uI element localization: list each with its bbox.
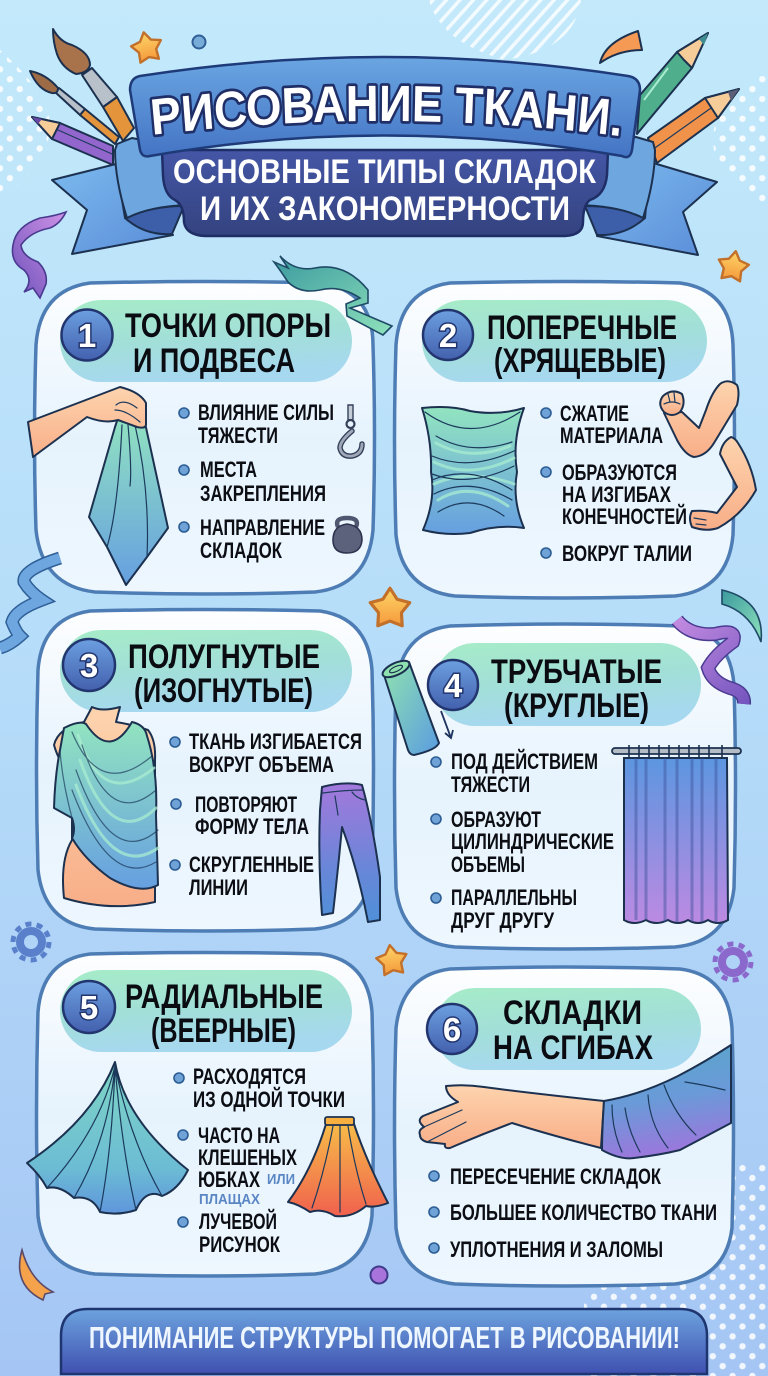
illustration: cloth roll with arrow (380, 657, 453, 755)
bullets 3: ПОВТОРЯЮТ (195, 792, 297, 817)
decorative icons lower (13, 924, 751, 1300)
heading 1: И ПОДВЕСА (133, 342, 295, 380)
panel: 6 folds at bends (394, 967, 734, 1286)
heading 4: ТРУБЧАТЫЕ (491, 653, 662, 691)
bullets 4 (431, 749, 614, 933)
bullets 1: СКЛАДОК (200, 538, 282, 563)
bullets 4: ТЯЖЕСТИ (451, 772, 530, 797)
bullets 4: ПАРАЛЛЕЛЬНЫ (451, 885, 577, 910)
bullets 3: ВОКРУГ ОБЪЕМА (189, 752, 334, 777)
bullets 4: ОБРАЗУЮТ (451, 807, 541, 832)
illustration: flared skirt (288, 1117, 388, 1216)
banner ribbon (51, 56, 718, 256)
icon: green pencil (637, 33, 708, 134)
illustration: draped mannequin (54, 707, 158, 906)
heading 6: 6 (443, 1011, 461, 1048)
heading 4: 4 (444, 667, 463, 704)
decorative icons header (12, 29, 751, 298)
bullets 5: ИЛИ (267, 1171, 295, 1188)
bullets 6 (429, 1164, 717, 1262)
bullets 5: РИСУНОК (199, 1232, 280, 1257)
bullets 4: ЦИЛИНДРИЧЕСКИЕ (451, 829, 614, 854)
heading 4: (КРУГЛЫЕ) (504, 687, 649, 725)
panel: 1 support points (28, 282, 374, 594)
bullets 1: МЕСТА (200, 457, 257, 482)
panel: 2 transverse folds (394, 282, 756, 598)
heading 4 (428, 643, 701, 726)
bullets 2: ВОКРУГ ТАЛИИ (562, 541, 692, 566)
bullets 4: ДРУГ ДРУГУ (451, 908, 554, 933)
icon: large paint brush (53, 29, 134, 141)
decorative ribbons top of panels (0, 256, 761, 648)
footer banner (61, 1309, 707, 1374)
icon: hook (340, 405, 362, 456)
bullets 6: УПЛОТНЕНИЯ И ЗАЛОМЫ (450, 1237, 663, 1262)
icon: kettlebell (333, 518, 362, 553)
bullets 6: ПЕРЕСЕЧЕНИЕ СКЛАДОК (450, 1164, 661, 1189)
bullets 2: СЖАТИЕ (560, 401, 629, 426)
title plate (128, 56, 642, 158)
bullets 2: ОБРАЗУЮТСЯ (562, 460, 677, 485)
icon: orange pencil (648, 89, 739, 163)
bullets 5: ПЛАЩАХ (199, 1191, 260, 1208)
heading 1: ТОЧКИ ОПОРЫ (125, 307, 331, 345)
bullets 1: ЗАКРЕПЛЕНИЯ (200, 481, 326, 506)
bullets 5: ЮБКАХ (198, 1167, 260, 1192)
bullets 3: ТКАНЬ ИЗГИБАЕТСЯ (189, 729, 362, 754)
heading 3: (ИЗОГНУТЫЕ) (134, 672, 313, 710)
heading 6: СКЛАДКИ (503, 994, 642, 1032)
icon: purple pencil (32, 117, 113, 165)
heading 2: 2 (439, 317, 457, 354)
illustration: curtain (612, 745, 741, 923)
bullets 1 (179, 400, 334, 563)
heading 5: 5 (80, 989, 98, 1026)
heading 5: РАДИАЛЬНЫЕ (125, 978, 323, 1016)
bullets 3 (170, 729, 362, 900)
heading 6: НА СГИБАХ (493, 1029, 653, 1067)
heading 1: 1 (78, 317, 96, 354)
illustration: compressed cloth (422, 407, 524, 534)
icon: small paint brush (30, 71, 119, 144)
heading 5: (ВЕЕРНЫЕ) (151, 1012, 296, 1050)
bullets 5: ЛУЧЕВОЙ (199, 1209, 277, 1234)
bullets 1: ВЛИЯНИЕ СИЛЫ (198, 400, 334, 425)
illustration: hanging cloth (28, 387, 168, 585)
illustration: arm with sleeve (420, 1045, 731, 1158)
bullets 3: СКРУГЛЕННЫЕ (189, 852, 314, 877)
bullets 3: ЛИНИИ (189, 875, 248, 900)
heading 6 (427, 988, 701, 1070)
heading 3 (60, 630, 352, 712)
bullets 5: ЧАСТО НА (198, 1123, 280, 1148)
bullets 4: ОБЪЕМЫ (451, 852, 525, 877)
bullets 1: ТЯЖЕСТИ (198, 423, 278, 448)
bullets 2: МАТЕРИАЛА (560, 423, 663, 448)
subtitle plate: ОСНОВНЫЕ ТИПЫ СКЛАДОК (173, 153, 596, 191)
title plate: РИСОВАНИЕ ТКАНИ. (150, 83, 622, 139)
illustration: radial cloth (27, 1062, 188, 1214)
heading 2: ПОПЕРЕЧНЫЕ (487, 309, 677, 347)
bullets 2: НА ИЗГИБАХ (562, 482, 671, 507)
bullets 5: КЛЕШЕНЫХ (198, 1145, 297, 1170)
bullets 2 (541, 401, 692, 566)
heading 3: 3 (80, 647, 98, 684)
bullets 4: ПОД ДЕЙСТВИЕМ (451, 749, 598, 774)
bullets 5: РАСХОДЯТСЯ (193, 1064, 306, 1089)
heading 2: (ХРЯЩЕВЫЕ) (494, 342, 666, 380)
bullets 5 (174, 1064, 345, 1257)
panel: 4 tubular folds (380, 624, 741, 949)
heading 5 (60, 970, 352, 1052)
panel: 3 semi-bent folds (36, 610, 380, 931)
illustration: trousers (319, 783, 380, 922)
bullets 3: ФОРМУ ТЕЛА (195, 814, 309, 839)
subtitle plate: И ИХ ЗАКОНОМЕРНОСТИ (200, 190, 570, 228)
decorative purple ribbon (677, 620, 744, 704)
bullets 1: НАПРАВЛЕНИЕ (200, 515, 325, 540)
bullets 5: ИЗ ОДНОЙ ТОЧКИ (193, 1087, 345, 1112)
illustration: bent arms (660, 381, 756, 530)
subtitle plate (162, 150, 608, 236)
bullets 2: КОНЕЧНОСТЕЙ (562, 504, 687, 529)
panel: 5 radial folds (27, 952, 388, 1276)
heading 1 (60, 300, 352, 382)
heading 2 (422, 300, 707, 382)
heading 3: ПОЛУГНУТЫЕ (128, 638, 320, 676)
